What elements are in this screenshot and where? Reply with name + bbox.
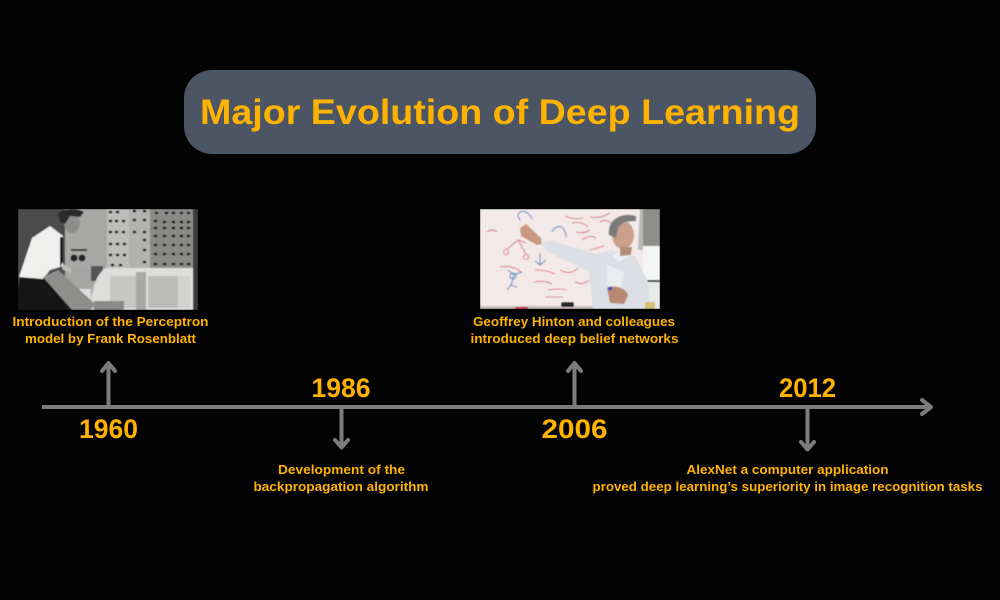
year: 2006: 2006 <box>542 414 608 444</box>
caption: AlexNet: AlexNet a computer application <box>686 463 888 477</box>
timeline arrow <box>42 400 931 414</box>
caption: deep belief networks: Geoffrey Hinton and colleagues <box>473 315 675 329</box>
year: 2012: 2012 <box>779 373 836 403</box>
arrow up: 1960 <box>102 363 115 405</box>
photo: Frank Rosenblatt with the Perceptron machine <box>18 209 198 310</box>
caption: deep belief networks: introduced deep belief networks <box>470 332 679 346</box>
arrow down: 1986 <box>335 407 348 448</box>
caption: backpropagation: backpropagation algorithm <box>254 480 428 494</box>
title: Major Evolution of Deep Learning <box>200 93 800 132</box>
arrow up: 2006 <box>568 363 581 405</box>
caption: Perceptron <box>12 315 208 346</box>
arrow down: 2012 <box>801 407 814 450</box>
caption: Perceptron: Introduction of the Perceptron <box>12 315 208 329</box>
title banner <box>184 70 816 154</box>
year: 1986: 1986 <box>312 373 370 403</box>
caption: Perceptron: model by Frank Rosenblatt <box>25 332 197 346</box>
caption: backpropagation: Development of the <box>278 463 405 477</box>
caption: deep belief networks <box>470 315 679 346</box>
year: 1960: 1960 <box>79 414 138 444</box>
caption: backpropagation <box>254 463 428 494</box>
caption: AlexNet <box>592 463 983 494</box>
photo: Geoffrey Hinton at a whiteboard <box>480 209 660 309</box>
caption: AlexNet: proved deep learning’s superiority in image recognition tasks <box>592 480 983 494</box>
